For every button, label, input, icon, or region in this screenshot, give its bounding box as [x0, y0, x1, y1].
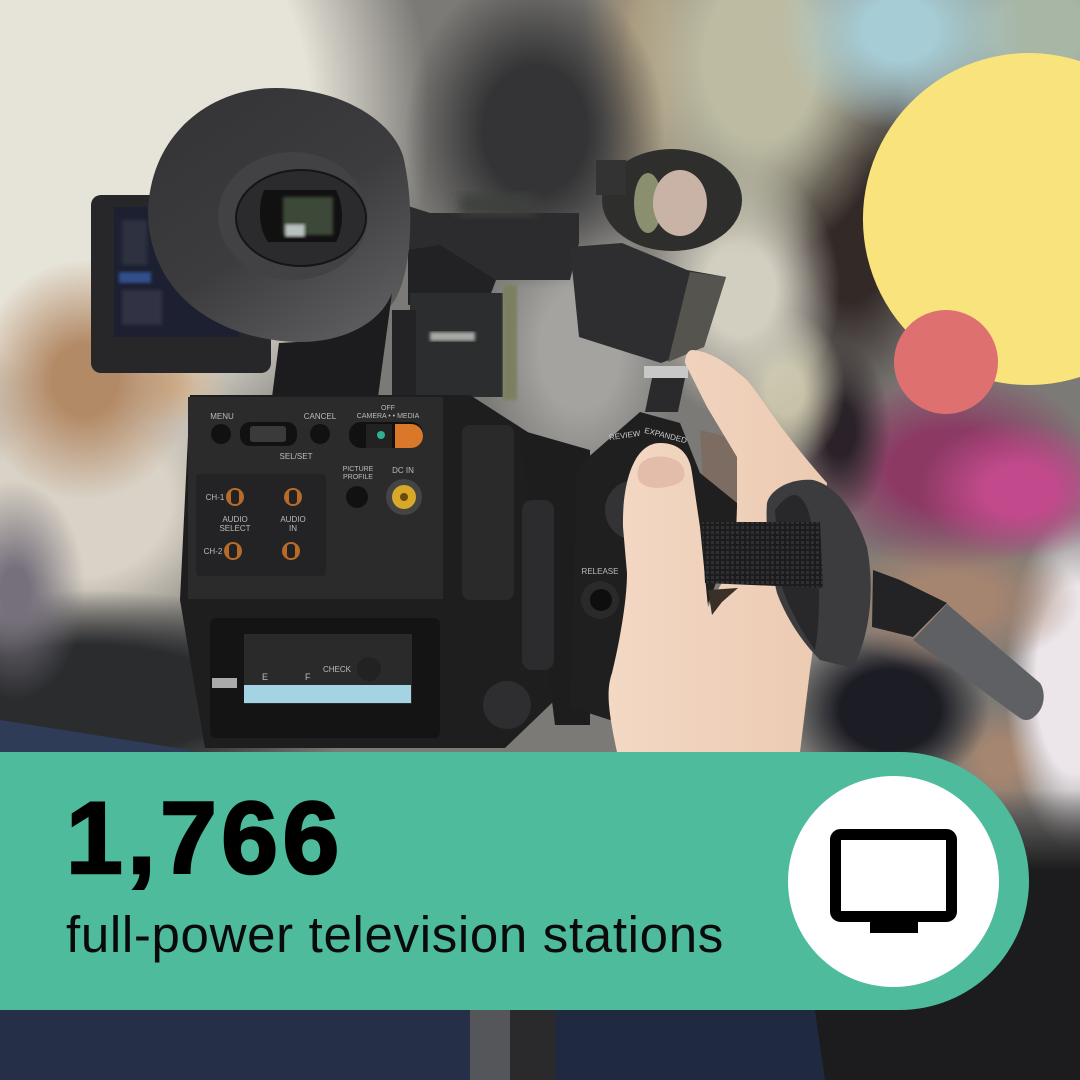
right grip	[570, 412, 742, 720]
camera body: SELECT	[219, 524, 251, 533]
hand	[609, 350, 827, 752]
right grip: RELEASE	[582, 567, 618, 576]
camera body: IN	[289, 524, 297, 533]
bottom jacket	[0, 720, 825, 1080]
icon: video camera	[91, 53, 1080, 752]
eyecup	[148, 88, 416, 397]
hand strap	[702, 480, 1044, 720]
camera body: CANCEL	[304, 412, 337, 421]
camera body: AUDIO	[222, 515, 248, 524]
camera screen	[91, 195, 271, 373]
camera body: CAMERA • • MEDIA	[357, 413, 420, 420]
camera body: CH-1	[206, 493, 225, 502]
camera body	[180, 395, 742, 748]
banner	[0, 752, 1029, 1010]
camera body: SEL/SET	[280, 452, 313, 461]
camera body: F	[305, 672, 311, 682]
camera body: MENU	[210, 412, 234, 421]
camera body: PICTURE	[343, 466, 374, 473]
camera body: OFF	[381, 405, 395, 412]
camera body: E	[262, 672, 268, 682]
icon: television in white circle	[788, 776, 999, 987]
big number: 1,766	[66, 781, 344, 895]
label text: full-power television stations	[66, 906, 724, 963]
decorative yellow circle	[863, 53, 1080, 385]
right grip: REVIEW	[608, 429, 641, 442]
camera body: DC IN	[392, 466, 414, 475]
decorative coral circle	[894, 310, 998, 414]
right grip: EXPANDED	[643, 426, 688, 445]
camera body: AUDIO	[280, 515, 306, 524]
camera body: CHECK	[323, 665, 352, 674]
camera body: CH-2	[204, 547, 223, 556]
top handle	[405, 149, 742, 412]
camera body: PROFILE	[343, 474, 373, 481]
